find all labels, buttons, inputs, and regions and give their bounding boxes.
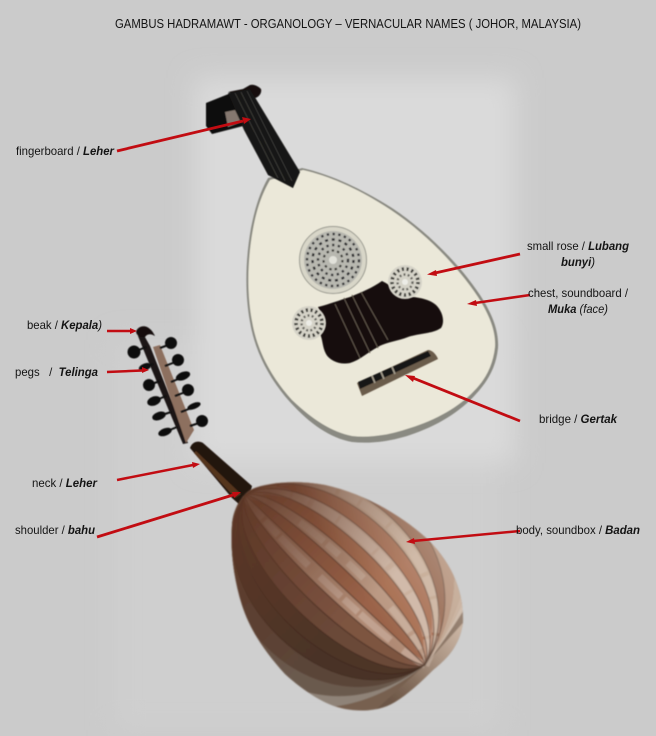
title: GAMBUS HADRAMAWT - ORGANOLOGY – VERNACULAR NAMES ( JOHOR, MALAYSIA) <box>115 17 581 31</box>
arrow: neck <box>117 462 200 480</box>
label: shoulder: shoulder / bahu <box>15 523 96 537</box>
label: neck: neck / Leher <box>32 476 98 490</box>
arrow: beak <box>107 328 137 334</box>
label: bridge: bridge / Gertak <box>539 412 618 426</box>
arrow: fingerboard <box>117 117 251 151</box>
label: small rose: bunyi) <box>561 255 595 269</box>
label: small rose <box>527 239 630 269</box>
shading <box>231 481 407 650</box>
staves <box>432 604 464 656</box>
illustration: oud back view <box>126 326 464 712</box>
large rose <box>300 226 366 294</box>
black pickguard with strings <box>318 281 443 364</box>
arrow: body <box>406 531 520 544</box>
fingerboard and head <box>206 85 300 188</box>
arrow: chest <box>467 295 530 306</box>
label: small rose: small rose / Lubang <box>527 239 630 253</box>
small rose left <box>292 306 326 340</box>
label: chest: chest, soundboard / <box>528 286 629 300</box>
arrow: small rose <box>427 254 520 276</box>
soundboard <box>246 168 498 443</box>
illustration: oud front view <box>206 85 498 443</box>
label: chest <box>528 286 629 316</box>
pale tile inlays <box>268 506 440 668</box>
label: fingerboard: fingerboard / Leher <box>16 144 115 158</box>
label: chest: Muka (face) <box>548 302 608 316</box>
stave seams <box>233 471 445 680</box>
label: body: body, soundbox / Badan <box>516 523 640 537</box>
label: beak: beak / Kepala) <box>27 318 102 332</box>
bridge <box>357 350 438 396</box>
label: pegs: pegs / Telinga <box>15 365 98 379</box>
tail patch <box>378 624 463 709</box>
bowl body <box>230 481 464 712</box>
pegbox <box>136 326 194 444</box>
arrow: shoulder <box>97 492 241 537</box>
neck <box>190 442 252 505</box>
small rose right <box>388 265 422 299</box>
arrow: bridge <box>405 375 520 421</box>
arrow: pegs <box>107 367 149 373</box>
tuning pegs <box>128 338 208 437</box>
